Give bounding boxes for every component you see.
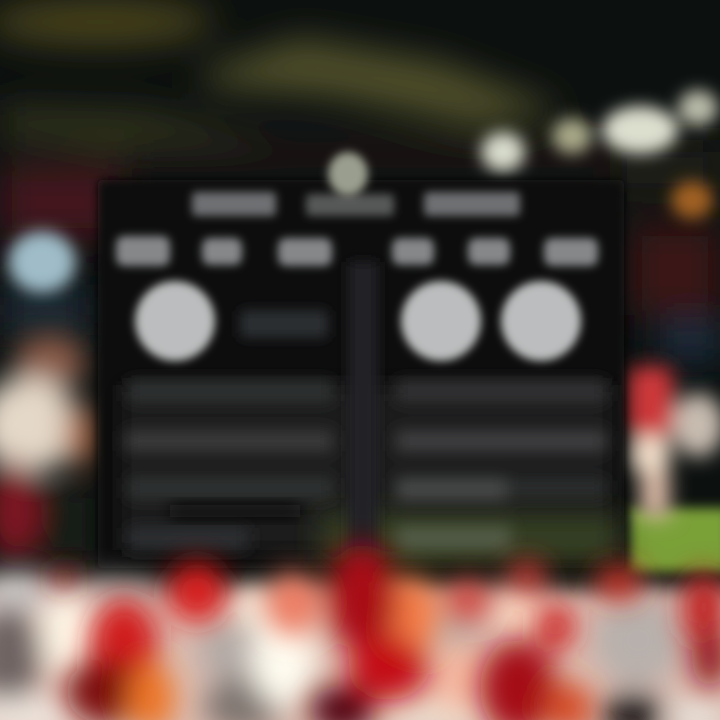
left column rows (125, 381, 333, 548)
crowd of red and white figures (0, 544, 720, 720)
centre divider (348, 262, 378, 562)
panel green tint (320, 515, 620, 563)
circular badges (135, 281, 581, 361)
panel heading (192, 192, 520, 216)
table header labels (116, 236, 598, 266)
right column rows (396, 381, 606, 550)
panel lower tone (122, 385, 612, 550)
stadium lights (8, 90, 718, 293)
central dark panel (98, 152, 624, 568)
left player (0, 334, 95, 560)
right player and pitch (628, 366, 720, 572)
heading icon (328, 152, 368, 196)
badge caption (240, 310, 328, 338)
left dark gap (170, 504, 300, 518)
